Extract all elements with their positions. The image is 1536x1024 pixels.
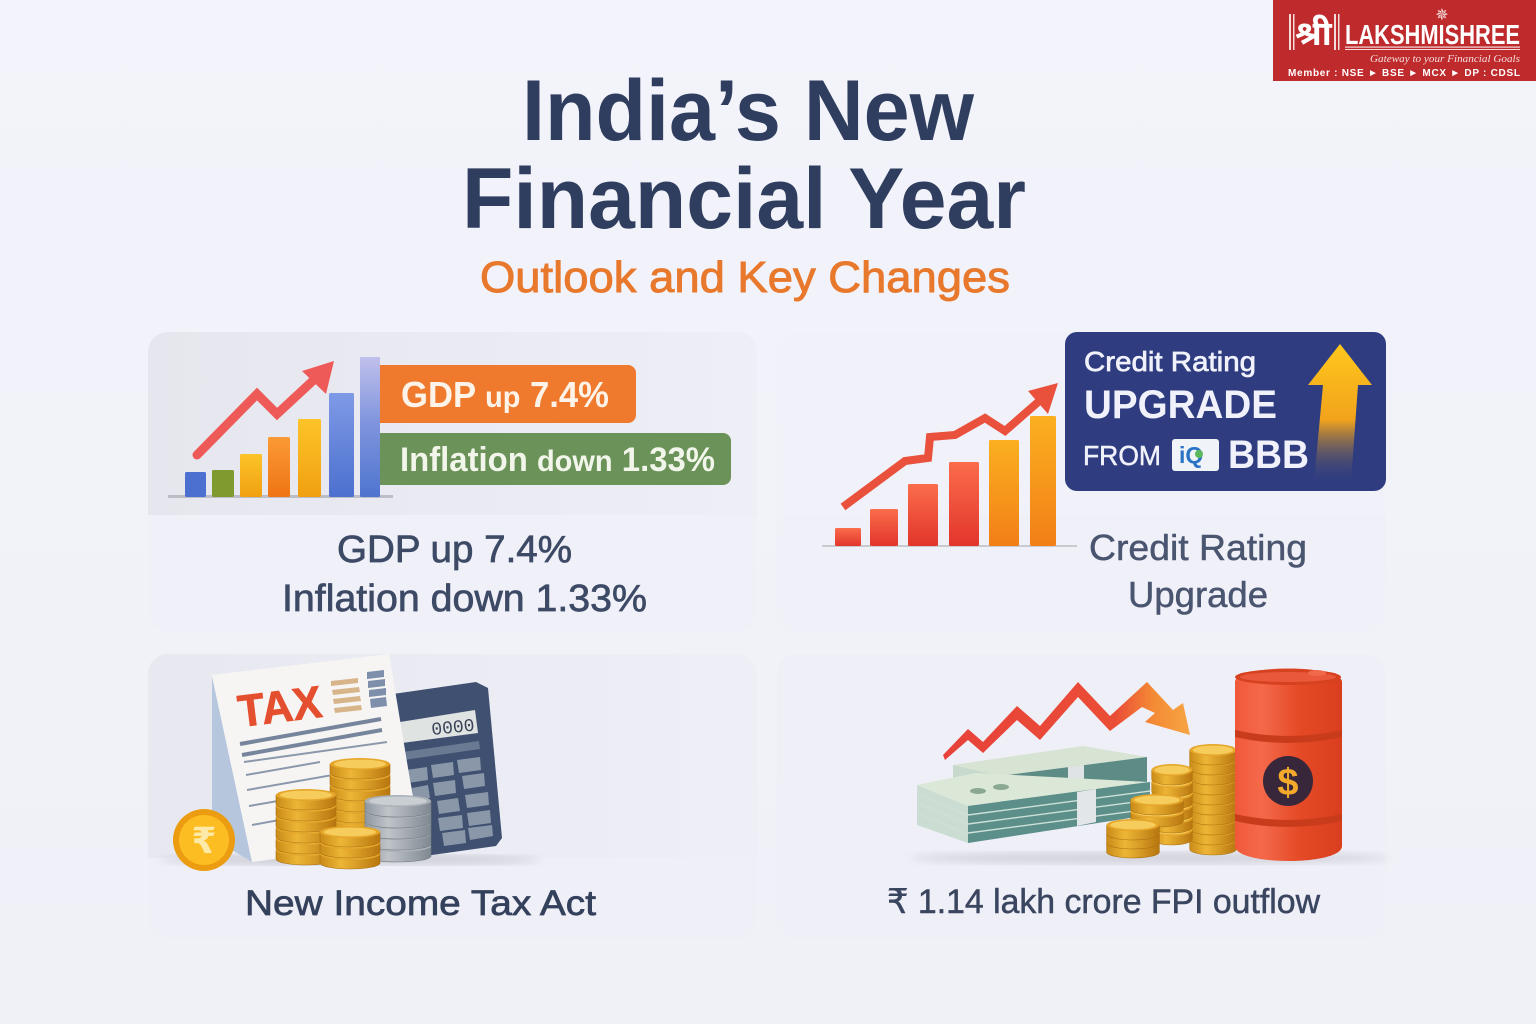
caption: credit rating upgrade: Credit Rating — [1089, 527, 1307, 568]
caption: FPI outflow: ₹ 1.14 lakh crore FPI outflow — [887, 883, 1320, 921]
icon: oil barrel: $ — [1277, 762, 1299, 804]
caption: GDP and inflation: Inflation down 1.33% — [282, 578, 647, 620]
logo: Lakshmishree: Gateway to your Financial Goals — [1370, 54, 1520, 65]
icon: oil barrel — [1235, 668, 1342, 861]
icon: cash stacks — [917, 746, 1150, 843]
label: Inflation down: Inflation down 1.33% — [400, 441, 715, 479]
icon: calculator — [393, 682, 502, 856]
label: GDP up — [380, 365, 636, 423]
icon: calculator: 0000 — [431, 717, 476, 741]
panel: GDP and inflation — [148, 332, 757, 632]
callout: credit rating upgrade: UPGRADE — [1084, 383, 1277, 427]
icon: rating agency mark — [1172, 439, 1219, 471]
icon: gold coin stack — [276, 758, 431, 869]
logo: Lakshmishree: Member : NSE ► BSE ► MCX ► DP : CDSL — [1288, 68, 1520, 79]
icon: tax form: TAX — [235, 676, 325, 737]
icon: rating agency mark: iQ — [1179, 442, 1203, 468]
label: Inflation down — [380, 433, 731, 485]
callout: credit rating upgrade: FROM — [1083, 440, 1161, 471]
icon: gold up arrow — [1308, 344, 1372, 482]
callout: credit rating upgrade: Credit Rating — [1084, 346, 1256, 377]
icon: gold coins — [1107, 744, 1236, 858]
panel: new income tax act — [148, 654, 757, 939]
caption: GDP and inflation — [282, 529, 647, 620]
caption: credit rating upgrade: Upgrade — [1128, 574, 1268, 615]
bar chart: rating rising — [822, 416, 1077, 547]
arrow: falling trend — [943, 682, 1190, 760]
title — [462, 63, 1026, 247]
title: India’s New — [522, 63, 975, 159]
icon: rupee coin: ₹ — [191, 820, 217, 861]
logo: Lakshmishree — [1273, 0, 1536, 81]
logo: Lakshmishree: ✵ — [1435, 7, 1449, 24]
icon: rupee coin — [173, 809, 235, 871]
subtitle: Outlook and Key Changes — [480, 253, 1010, 302]
caption: new income tax act: New Income Tax Act — [245, 884, 596, 923]
callout: credit rating upgrade — [1065, 332, 1386, 491]
arrow: GDP rising — [197, 361, 334, 455]
caption: GDP and inflation: GDP up 7.4% — [337, 529, 572, 571]
panel: FPI outflow — [777, 654, 1390, 939]
icon: tax form — [212, 654, 420, 862]
arrow: rating rising — [843, 383, 1058, 507]
caption: credit rating upgrade — [1089, 527, 1307, 615]
callout: credit rating upgrade: BBB — [1228, 433, 1309, 477]
label: GDP up: GDP up 7.4% — [401, 374, 609, 415]
panel: credit rating upgrade — [777, 332, 1386, 632]
logo: Lakshmishree: श्री — [1295, 15, 1333, 53]
bar chart: rising GDP — [168, 357, 393, 498]
title: Financial Year — [462, 151, 1026, 247]
